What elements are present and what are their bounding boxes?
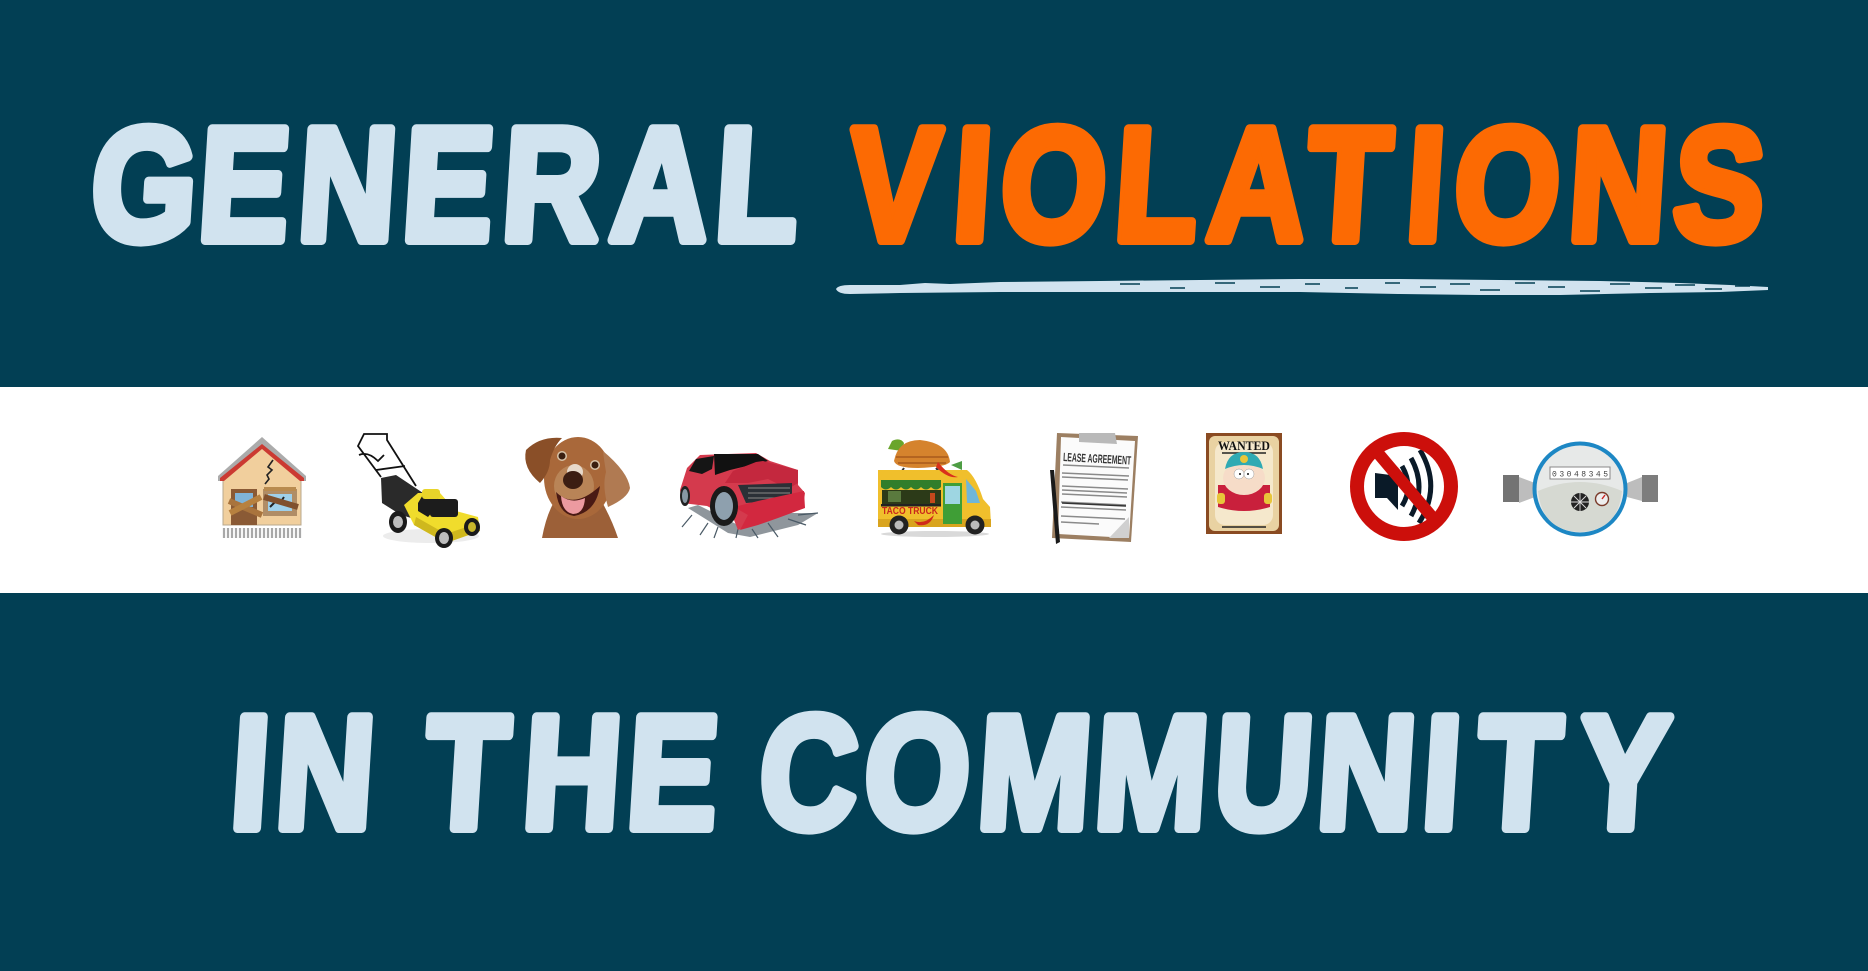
word: VIOLATIONS: VIOLATIONS <box>844 94 1770 275</box>
icon: wanted poster <box>1206 433 1282 534</box>
words: IN THE COMMUNITY: IN THE COMMUNITY <box>0 682 1675 863</box>
word: GENERAL: GENERAL <box>86 94 804 275</box>
icon: water meter <box>1503 442 1658 536</box>
icon: lawn mower <box>358 434 480 548</box>
brush underline <box>836 279 1768 295</box>
icon: taco truck <box>878 439 991 537</box>
icon: wrecked red car <box>680 453 818 538</box>
title line one <box>86 94 1770 275</box>
icon: lease agreement clipboard <box>1050 433 1138 544</box>
meter digits: 03048345 <box>1552 470 1608 480</box>
icon: smiling brown dog <box>525 437 630 538</box>
white icon band <box>0 387 1868 593</box>
poster heading: WANTED <box>1218 438 1270 453</box>
truck lettering: TACO TRUCK <box>882 505 938 517</box>
icon: no noise sign <box>1357 439 1451 534</box>
icon: damaged boarded-up house <box>218 437 306 538</box>
clipboard title: LEASE AGREEMENT <box>1063 450 1132 468</box>
